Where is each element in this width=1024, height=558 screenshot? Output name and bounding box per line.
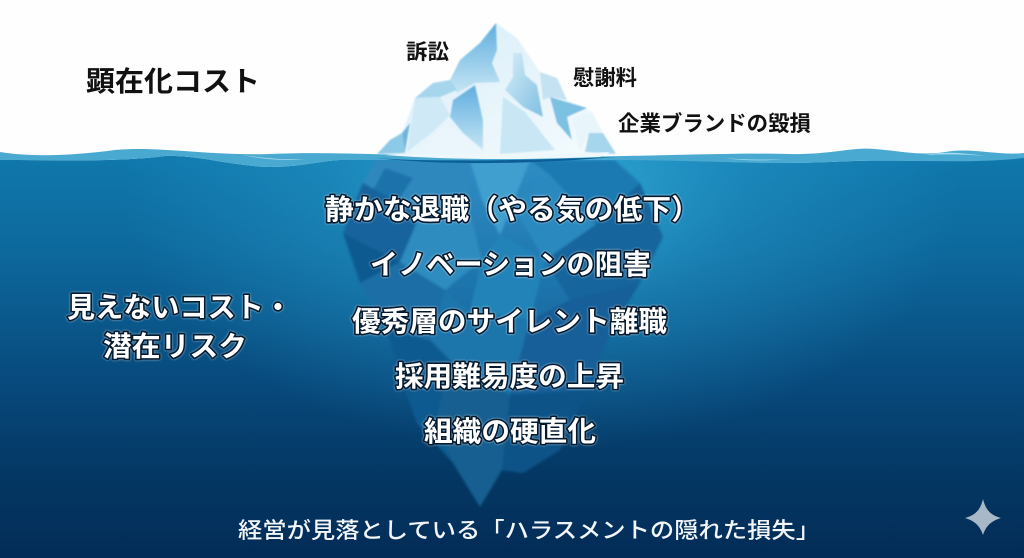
background: sky [0,0,1024,170]
item: harder recruiting: 採用難易度の上昇 [395,361,624,392]
label: brand damage: 企業ブランドの毀損 [618,111,811,136]
list: hidden items [325,194,700,447]
item: quiet quitting: 静かな退職（やる気の低下） [325,194,700,225]
item: organizational rigidity: 組織の硬直化 [424,416,596,447]
label: lawsuit: 訴訟 [406,41,449,64]
icon: sparkle [965,499,1001,535]
item: silent departure of top talent: 優秀層のサイレント離職 [352,306,667,337]
iceberg: above water [377,23,616,156]
water surface waves [0,149,1024,167]
iceberg: underwater part [343,160,663,507]
heading: hidden costs and latent risks: 見えないコスト・ [67,292,292,323]
label: compensation: 慰謝料 [573,67,637,90]
caption: 経営が見落としている「ハラスメントの隠れた損失」 [238,518,820,543]
ocean [0,156,1024,558]
heading: hidden costs and latent risks [67,292,292,362]
heading: visible costs: 顕在化コスト [86,66,260,97]
heading: hidden costs and latent risks: 潜在リスク [103,331,247,362]
item: inhibited innovation: イノベーションの阻害 [370,249,651,280]
